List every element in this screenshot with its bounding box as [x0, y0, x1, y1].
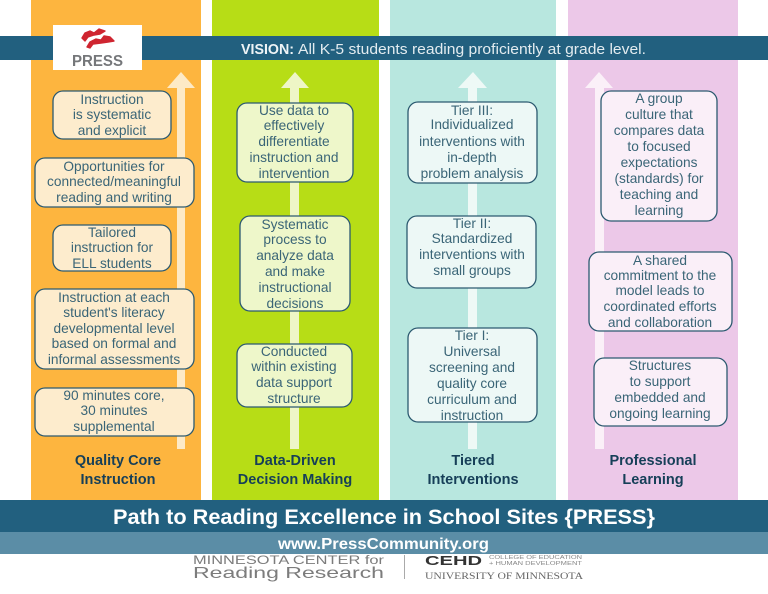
box: minutes: 90 minutes core, [63, 388, 165, 403]
box: group culture: compares data [614, 123, 705, 138]
arrow: data-driven [281, 72, 309, 449]
arrow: professional learning [585, 72, 613, 449]
box: tier I: curriculum and [427, 392, 517, 407]
heading: data-driven decision making: Decision Making [238, 472, 352, 488]
box: tier I: quality core [437, 376, 507, 391]
box: use data: differentiate [258, 134, 330, 149]
heading: professional learning: Learning [622, 472, 684, 488]
box: group culture: A group [635, 91, 683, 106]
box: systematic process: decisions [266, 296, 324, 311]
logo: Minnesota Center for Reading Research: MINNESOTA CENTER for [193, 555, 384, 567]
panel: professional learning [568, 0, 738, 500]
box: systematic process: analyze data [256, 248, 334, 263]
heading: data-driven decision making [238, 453, 352, 488]
box: systematic process: process to [263, 232, 327, 247]
box: opportunities: reading and writing [56, 190, 172, 205]
box: shared commitment: A shared [633, 253, 687, 268]
box: tier II: Tier II: [453, 216, 491, 231]
box: use data: effectively [264, 118, 324, 133]
box: opportunities: Opportunities for [63, 159, 165, 174]
box: systematic instruction: is systematic [73, 107, 151, 122]
arrow: quality core instruction [167, 72, 195, 449]
box: developmental level: Instruction at each [58, 290, 170, 305]
box: systematic process [240, 216, 350, 311]
logo: CEHD University of Minnesota: + HUMAN DEVELOPMENT [489, 561, 582, 567]
box: structures: to support [630, 374, 691, 389]
box: developmental level: developmental level [54, 321, 174, 336]
title banner: Path to Reading Excellence in School Sites {PRESS} [113, 506, 655, 529]
box: group culture: to focused [627, 139, 691, 154]
heading: professional learning: Professional [609, 453, 697, 469]
box: existing structure [237, 344, 352, 407]
box: tier II: Standardized [432, 231, 512, 246]
box: group culture: (standards) for [614, 171, 704, 186]
box: minutes: supplemental [73, 419, 155, 434]
logo: Minnesota Center for Reading Research: Reading Research [193, 565, 384, 582]
title banner [0, 500, 768, 532]
box: tier II: small groups [433, 263, 511, 278]
box: tier III [408, 102, 537, 183]
box: tailored instruction: instruction for [71, 240, 154, 255]
box: shared commitment: and collaboration [608, 315, 712, 330]
heading: tiered interventions: Interventions [427, 472, 519, 488]
box: use data: intervention [259, 166, 329, 181]
vision banner [0, 36, 768, 60]
box: tailored instruction [53, 225, 171, 271]
heading: tiered interventions [427, 453, 519, 488]
box: tailored instruction: ELL students [72, 256, 152, 271]
heading: quality core instruction: Instruction [81, 472, 155, 488]
box: systematic process: instructional [258, 280, 332, 295]
box: shared commitment: commitment to the [604, 268, 716, 283]
box: systematic instruction: Instruction [80, 92, 144, 107]
box: structures: ongoing learning [609, 406, 711, 421]
box: structures: embedded and [614, 390, 706, 405]
box: tier III: interventions with [419, 134, 525, 149]
logo: Minnesota Center for Reading Research [193, 555, 384, 582]
box: tier II: interventions with [419, 247, 525, 262]
box: tailored instruction: Tailored [88, 225, 136, 240]
icon: red birds [82, 29, 114, 48]
logo: CEHD University of Minnesota: UNIVERSITY OF MINNESOTA [425, 572, 583, 582]
box: opportunities: connected/meaningful [47, 174, 181, 189]
box: use data: instruction and [249, 150, 339, 165]
box: opportunities [35, 158, 194, 207]
heading: quality core instruction: Quality Core [75, 453, 161, 469]
box: group culture: teaching and [620, 187, 698, 202]
heading: professional learning [609, 453, 697, 488]
box: existing structure: structure [267, 391, 321, 406]
box: developmental level: informal assessments [48, 352, 180, 367]
panel: data-driven decision making [212, 0, 379, 500]
box: tier I: screening and [429, 360, 515, 375]
box: group culture: expectations [621, 155, 698, 170]
box: systematic instruction: and explicit [78, 123, 146, 138]
arrow: tiered [458, 72, 487, 449]
box: tier III: Individualized [431, 117, 513, 132]
box: existing structure: Conducted [261, 344, 327, 359]
logo: CEHD University of Minnesota: COLLEGE OF EDUCATION [489, 555, 583, 561]
box: group culture: culture that [625, 107, 693, 122]
box: existing structure: within existing [250, 359, 337, 374]
box: minutes: 30 minutes [81, 403, 148, 418]
heading: data-driven decision making: Data-Driven [254, 453, 336, 469]
logo: PRESS: PRESS [72, 53, 123, 70]
box: shared commitment: coordinated efforts [603, 299, 717, 314]
box: structures: Structures [629, 358, 691, 373]
box: tier III: Tier III: [451, 103, 493, 118]
logo: CEHD University of Minnesota [404, 554, 583, 582]
vision banner: All K-5 students reading proficiently at grade level. [298, 42, 646, 58]
box: tier I: Tier I: [455, 328, 489, 343]
vision banner: VISION: [241, 42, 294, 58]
box: tier III: problem analysis [421, 166, 524, 181]
box: tier III: in-depth [447, 150, 497, 165]
box: minutes [35, 388, 194, 436]
box: developmental level: student's literacy [63, 305, 165, 320]
logo: CEHD University of Minnesota: CEHD [425, 554, 482, 568]
box: systematic instruction [53, 91, 171, 139]
box: tier I: Universal [443, 344, 501, 359]
panel: quality core instruction [31, 0, 201, 500]
box: structures [594, 358, 727, 426]
box: use data [237, 103, 353, 182]
box: systematic process: Systematic [262, 217, 329, 232]
panel: tiered interventions [390, 0, 556, 500]
heading: quality core instruction [75, 453, 161, 488]
box: group culture [601, 91, 717, 221]
website banner: www.PressCommunity.org [277, 536, 489, 553]
website banner [0, 532, 768, 554]
box: shared commitment: model leads to [615, 283, 705, 298]
box: tier II [407, 216, 536, 288]
box: tier I [408, 328, 537, 423]
box: group culture: learning [635, 203, 683, 218]
logo: PRESS [53, 25, 142, 70]
box: shared commitment [589, 252, 732, 331]
box: use data: Use data to [259, 103, 329, 118]
box: developmental level [35, 289, 194, 369]
box: tier I: instruction [441, 408, 503, 423]
heading: tiered interventions: Tiered [451, 453, 495, 469]
box: developmental level: based on formal and [52, 336, 176, 351]
box: existing structure: data support [256, 375, 332, 390]
box: systematic process: and make [265, 264, 325, 279]
